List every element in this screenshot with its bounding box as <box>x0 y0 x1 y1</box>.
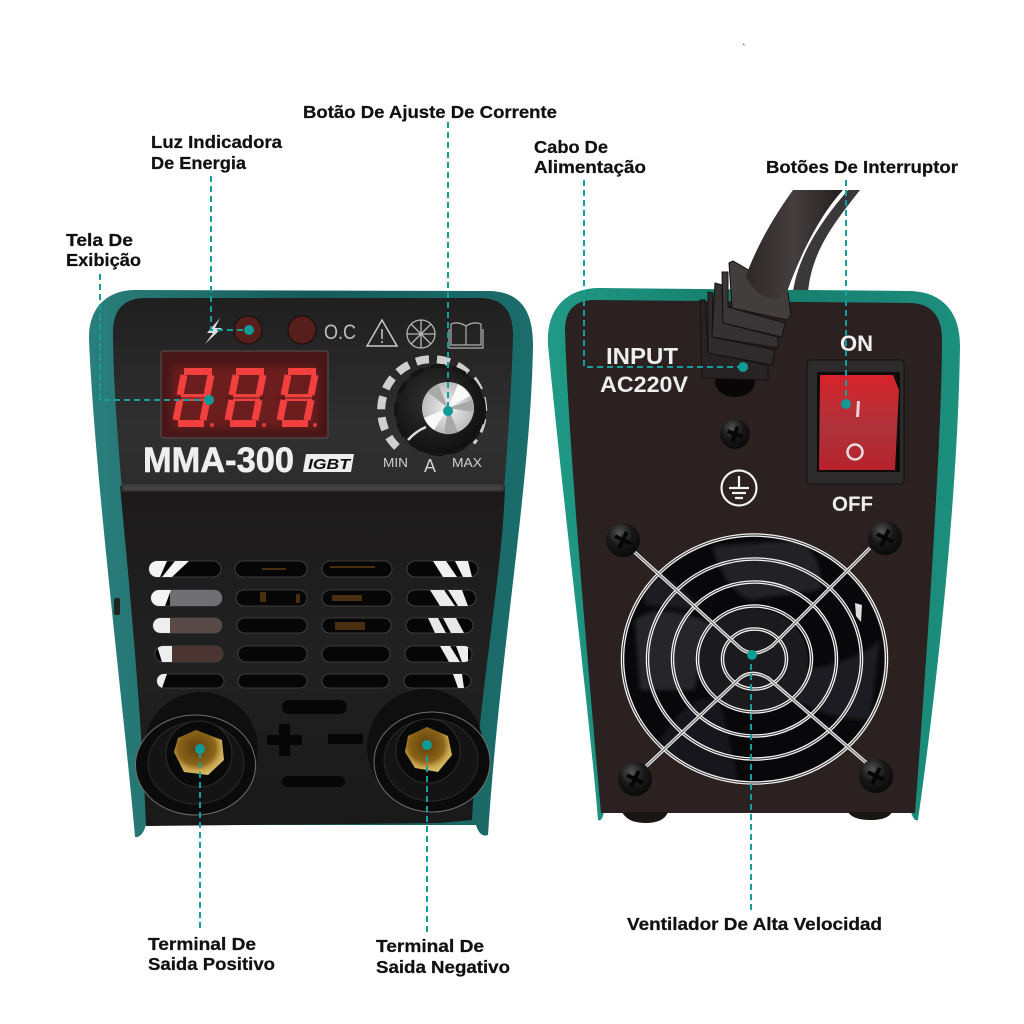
label: display: Tela De <box>66 230 133 250</box>
knob MAX label: MAX <box>452 456 483 470</box>
voltage label: AC220V <box>600 372 688 397</box>
grille wires <box>630 548 877 772</box>
overcurrent label: O.C <box>324 321 356 344</box>
label: positive terminal: Terminal De <box>148 934 256 954</box>
bottom terminal slot <box>282 776 345 787</box>
leader: negative terminal <box>422 740 432 932</box>
welder front view <box>89 290 533 837</box>
teal rear shell <box>548 288 960 820</box>
grille rings <box>622 535 886 783</box>
screw top right <box>868 521 902 555</box>
knob pointer <box>408 427 426 440</box>
teal side shell <box>89 290 533 837</box>
icon: manual book <box>449 323 483 348</box>
fan opening <box>624 537 884 781</box>
ground screw <box>720 419 750 449</box>
label: positive terminal: Saida Positivo <box>148 954 275 974</box>
fan hub <box>696 608 808 712</box>
stray mark: ` <box>742 43 746 55</box>
leader: positive terminal <box>195 744 205 930</box>
icon: fan wheel <box>407 320 435 348</box>
rear panel <box>565 300 942 813</box>
knob A label: A <box>424 456 436 476</box>
leader: switch <box>841 180 851 409</box>
icon: warning triangle <box>367 320 397 346</box>
model name: MMA-300 <box>143 441 294 480</box>
label: power cable: Alimentação <box>534 157 646 177</box>
current knob <box>381 359 485 455</box>
label: display: Exibição <box>66 250 141 270</box>
ground symbol <box>722 470 756 506</box>
digital display <box>161 351 328 438</box>
screw bottom left <box>618 762 652 796</box>
scale ring <box>381 359 483 447</box>
leader: display <box>100 274 214 405</box>
power cable <box>746 190 843 300</box>
rocker switch <box>807 360 904 484</box>
label: negative terminal: Terminal De <box>376 936 484 956</box>
brushed metal cap <box>422 382 474 434</box>
indicator lamp <box>234 316 262 344</box>
OFF label: OFF <box>832 493 873 516</box>
leader: fan <box>747 650 757 912</box>
welder rear view <box>548 190 960 823</box>
ON label: ON <box>840 331 873 356</box>
rubber feet <box>622 812 892 823</box>
plus symbol <box>267 724 302 756</box>
input label: INPUT <box>606 343 678 369</box>
leader: power cable <box>584 180 748 372</box>
coil glimpses behind slots <box>260 566 375 630</box>
knob MIN label: MIN <box>383 456 408 470</box>
label: power cable: Cabo De <box>534 137 608 157</box>
label: fan: Ventilador De Alta Velocidad <box>627 914 882 934</box>
IGBT badge: IGBT <box>308 456 352 473</box>
positive terminal <box>136 692 258 815</box>
top terminal slot <box>282 700 347 714</box>
overcurrent lamp <box>288 316 316 344</box>
cable strain relief <box>700 261 791 380</box>
leader: current knob <box>443 122 453 416</box>
label: switch: Botões De Interruptor <box>766 157 958 177</box>
cable entry hole <box>715 367 755 397</box>
cooling fan <box>606 521 902 796</box>
label: negative terminal: Saida Negativo <box>376 957 510 977</box>
screw top left <box>606 523 640 557</box>
side knob <box>114 598 120 615</box>
minus symbol <box>328 734 363 744</box>
upper control panel <box>113 298 513 490</box>
knob body <box>395 365 485 455</box>
fan blades <box>635 540 880 790</box>
label: power indicator: De Energia <box>151 153 246 173</box>
IGBT badge <box>303 454 354 473</box>
negative terminal <box>367 689 490 812</box>
screw bottom right <box>859 759 893 793</box>
lower body panel <box>120 486 505 826</box>
leader: power lamp <box>211 176 254 335</box>
panel ledge <box>122 485 503 491</box>
rear cable behind <box>793 190 860 292</box>
label: current knob: Botão De Ajuste De Corrente <box>303 102 557 122</box>
label: power indicator: Luz Indicadora <box>151 132 282 152</box>
ventilation slots <box>149 561 478 688</box>
icon: power bolt <box>205 318 222 344</box>
reflections inside slots <box>149 561 472 688</box>
